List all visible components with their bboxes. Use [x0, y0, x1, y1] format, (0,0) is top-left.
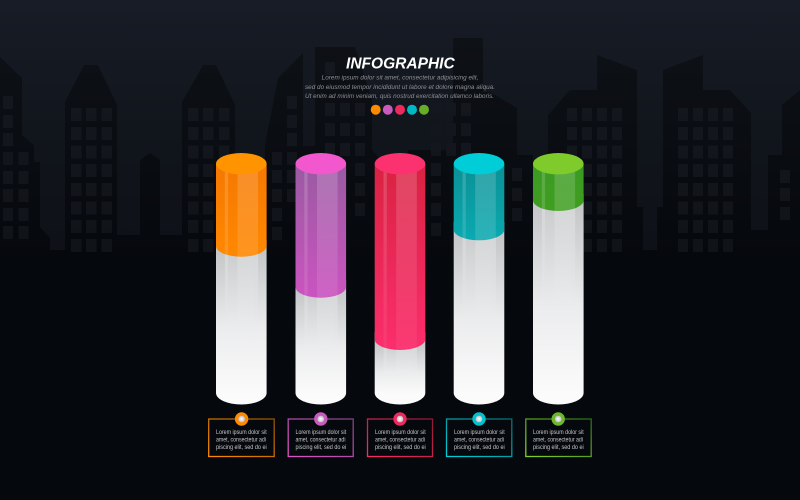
callout 3: pink	[368, 412, 432, 456]
windows: left edge tower	[3, 96, 28, 239]
callout 1: orange: amet, consectetur adi	[216, 437, 266, 444]
callout 5: green	[526, 412, 591, 456]
windows: centre towers	[272, 62, 522, 240]
callout 3: pink: piscing elit, sed do ei	[375, 444, 426, 451]
callout 5: green: Lorem ipsum dolor sit	[533, 429, 584, 436]
subtitle text: Lorem ipsum dolor sit amet, consectetur adipisicing elit,	[322, 74, 479, 82]
cylinder 5: green	[533, 153, 584, 404]
cylinder 4: teal	[454, 153, 504, 404]
callout 4: teal: piscing elit, sed do ei	[454, 444, 505, 451]
subtitle text: Ut enim ad minim veniam, quis nostrud exercitation ullamco laboris.	[305, 93, 494, 100]
subtitle text	[305, 74, 495, 100]
colour dots legend	[371, 105, 429, 115]
callout 4: teal: amet, consectetur adi	[454, 437, 504, 444]
callout 5: green: piscing elit, sed do ei	[533, 444, 584, 451]
callout 2: purple: amet, consectetur adi	[296, 437, 346, 444]
callout 1: orange: Lorem ipsum dolor sit	[216, 429, 267, 436]
cylinder 2: purple	[296, 153, 346, 404]
callout 2: purple: Lorem ipsum dolor sit	[296, 429, 346, 436]
subtitle text: sed do eiusmod tempor incididunt ut labore et dolore magna aliqua.	[305, 84, 495, 91]
cylinder 1: orange	[216, 153, 267, 404]
callout 2: purple: piscing elit, sed do ei	[296, 444, 346, 451]
callout 3: pink: Lorem ipsum dolor sit	[375, 429, 426, 436]
windows: third tower	[188, 108, 230, 252]
title: INFOGRAPHIC	[346, 56, 455, 73]
callout 1: orange	[209, 412, 274, 456]
callout 3: pink: amet, consectetur adi	[375, 437, 425, 444]
city skyline silhouette	[0, 38, 800, 262]
windows: right towers	[567, 108, 790, 252]
cylinder 3: pink	[375, 153, 425, 404]
callout 4: teal: Lorem ipsum dolor sit	[454, 429, 505, 436]
callout 2: purple	[288, 412, 353, 456]
callout 1: orange: piscing elit, sed do ei	[216, 444, 267, 451]
callout 4: teal	[446, 412, 512, 456]
windows: second tower	[71, 108, 112, 252]
callout 5: green: amet, consectetur adi	[533, 437, 583, 444]
